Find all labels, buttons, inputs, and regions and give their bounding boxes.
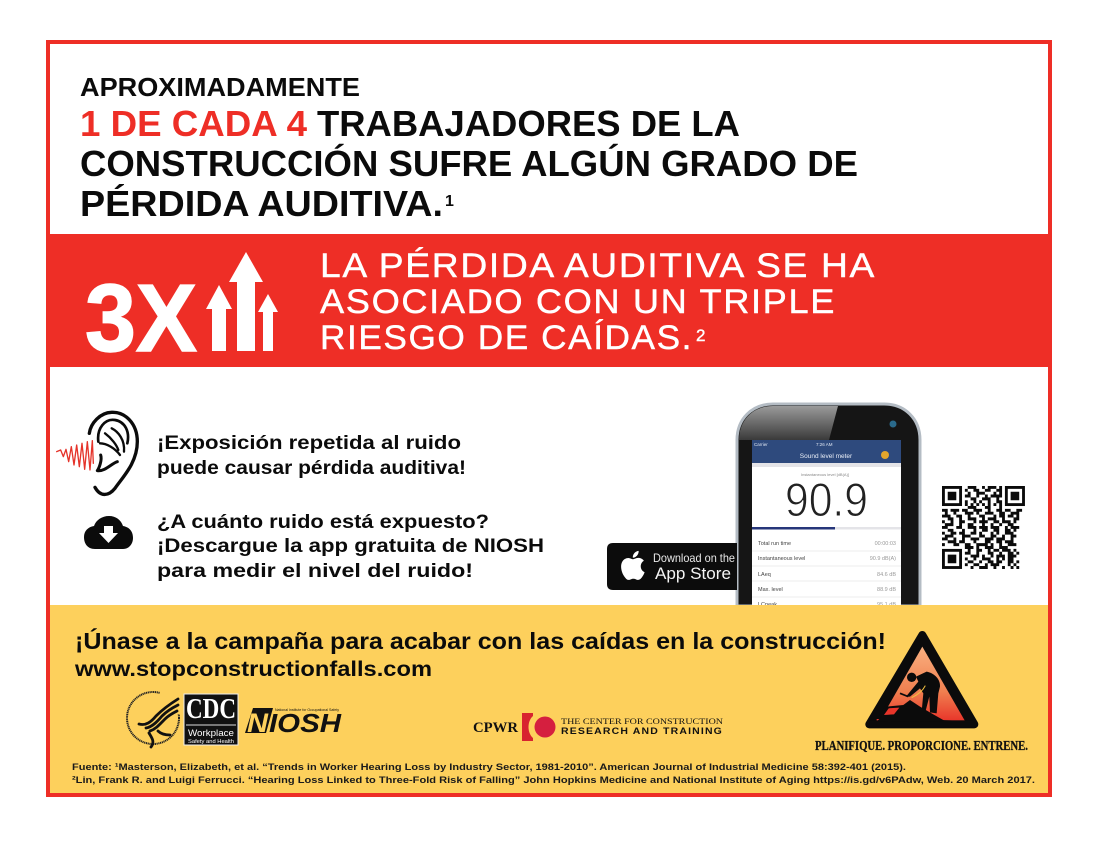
text: noise exposure warning: puede causar pérdida auditiva! — [157, 458, 466, 479]
logo: NIOSH — [245, 707, 342, 738]
text: download the app: para medir el nivel del ruido! — [157, 561, 473, 582]
panel: red band — [50, 234, 1048, 372]
app screen: 90.9 — [785, 473, 868, 526]
sources: Fuente: ¹Masterson, Elizabeth, et al. “Trends in Worker Hearing Loss by Industry Sector, 1981-2010”. American Journal of Industrial Medicine 58:392-401 (2015). — [72, 762, 906, 773]
badge: App Store: Download on the — [653, 551, 735, 565]
badge: App Store — [607, 543, 737, 590]
badge: App Store: App Store — [655, 564, 731, 583]
app screen: Carrier — [754, 442, 768, 447]
icon: three rising arrows — [206, 252, 278, 351]
logo: NIOSH: National Institute for Occupational Safety — [275, 707, 339, 712]
text: download the app: ¿A cuánto ruido está expuesto? — [157, 512, 489, 533]
logo: HHS — [127, 688, 184, 747]
app screen: Instantaneous level — [758, 556, 805, 562]
band text — [320, 247, 876, 357]
app screen: LCpeak — [758, 602, 777, 608]
logo: CPWR: RESEARCH AND TRAINING — [561, 726, 723, 736]
panel: yellow call to action — [50, 605, 1048, 793]
app screen: 00:00:03 — [875, 541, 896, 547]
heading: aproximadamente: APROXIMADAMENTE — [80, 72, 360, 102]
app screen: 90.9 dB(A) — [870, 556, 896, 562]
sources: ²Lin, Frank R. and Luigi Ferrucci. “Hearing Loss Linked to Three-Fold Risk of Falling” John Hopkins Medicine and National Institute of Aging https://is.gd/v6PAdw, Web. 20 March 2017. — [72, 775, 1035, 786]
app screen — [752, 440, 901, 608]
icon: warning triangle with worker — [869, 635, 974, 728]
heading line 3: PÉRDIDA AUDITIVA. — [80, 183, 443, 224]
logo: NIOSH: IOSH — [269, 708, 342, 738]
app screen: 7:26 AM — [816, 442, 833, 447]
app screen: 95.1 dB — [877, 602, 896, 608]
3X label: 3X — [85, 265, 197, 372]
band text: 2 — [696, 326, 705, 345]
band text: LA PÉRDIDA AUDITIVA SE HA — [320, 247, 876, 285]
footnote marker 1: 1 — [445, 193, 454, 210]
phone with sound level meter app — [737, 404, 920, 608]
text: noise exposure warning: ¡Exposición repetida al ruido — [157, 433, 461, 454]
band text: RIESGO DE CAÍDAS. — [320, 319, 693, 357]
QR code — [942, 487, 1024, 568]
heading: 1 de cada 4: 1 DE CADA 4 — [80, 103, 307, 144]
logo: NIOSH: N — [247, 708, 269, 738]
logo: CDC: Workplace — [188, 728, 234, 738]
heading line 2: CONSTRUCCIÓN SUFRE ALGÚN GRADO DE — [80, 142, 858, 184]
app screen: Max. level — [758, 587, 783, 593]
campaign website: www.stopconstructionfalls.com — [74, 658, 432, 681]
app screen: Instantaneous level [dB(A)] — [801, 472, 849, 477]
app screen: 88.9 dB — [877, 587, 896, 593]
icon: cloud download — [84, 516, 133, 549]
text: noise exposure warning — [157, 433, 466, 479]
panel: headline — [80, 72, 858, 224]
app screen: Sound level meter — [800, 453, 853, 460]
heading line 1: TRABAJADORES DE LA — [317, 103, 740, 144]
logo: CPWR: CPWR — [473, 720, 518, 736]
app screen: Total run time — [758, 541, 791, 547]
app screen: LAeq — [758, 572, 771, 578]
logo: CDC: CDC — [186, 694, 236, 725]
logo: CPWR: THE CENTER FOR CONSTRUCTION — [561, 717, 723, 726]
icon: ear with noise wave — [57, 412, 137, 494]
logo: CDC: Safety and Health — [188, 739, 234, 745]
band text: ASOCIADO CON UN TRIPLE — [320, 283, 836, 321]
logo: CPWR — [473, 713, 723, 741]
text: download the app: ¡Descargue la app gratuita de NIOSH — [157, 536, 544, 557]
text: download the app — [157, 512, 544, 582]
campaign heading: ¡Únase a la campaña para acabar con las caídas en la construcción! — [75, 627, 886, 654]
app screen: 84.6 dB — [877, 572, 896, 578]
logo: CDC — [184, 694, 238, 745]
slogan: PLANIFIQUE. PROPORCIONE. ENTRENE. — [815, 739, 1028, 754]
sources — [72, 762, 1035, 786]
